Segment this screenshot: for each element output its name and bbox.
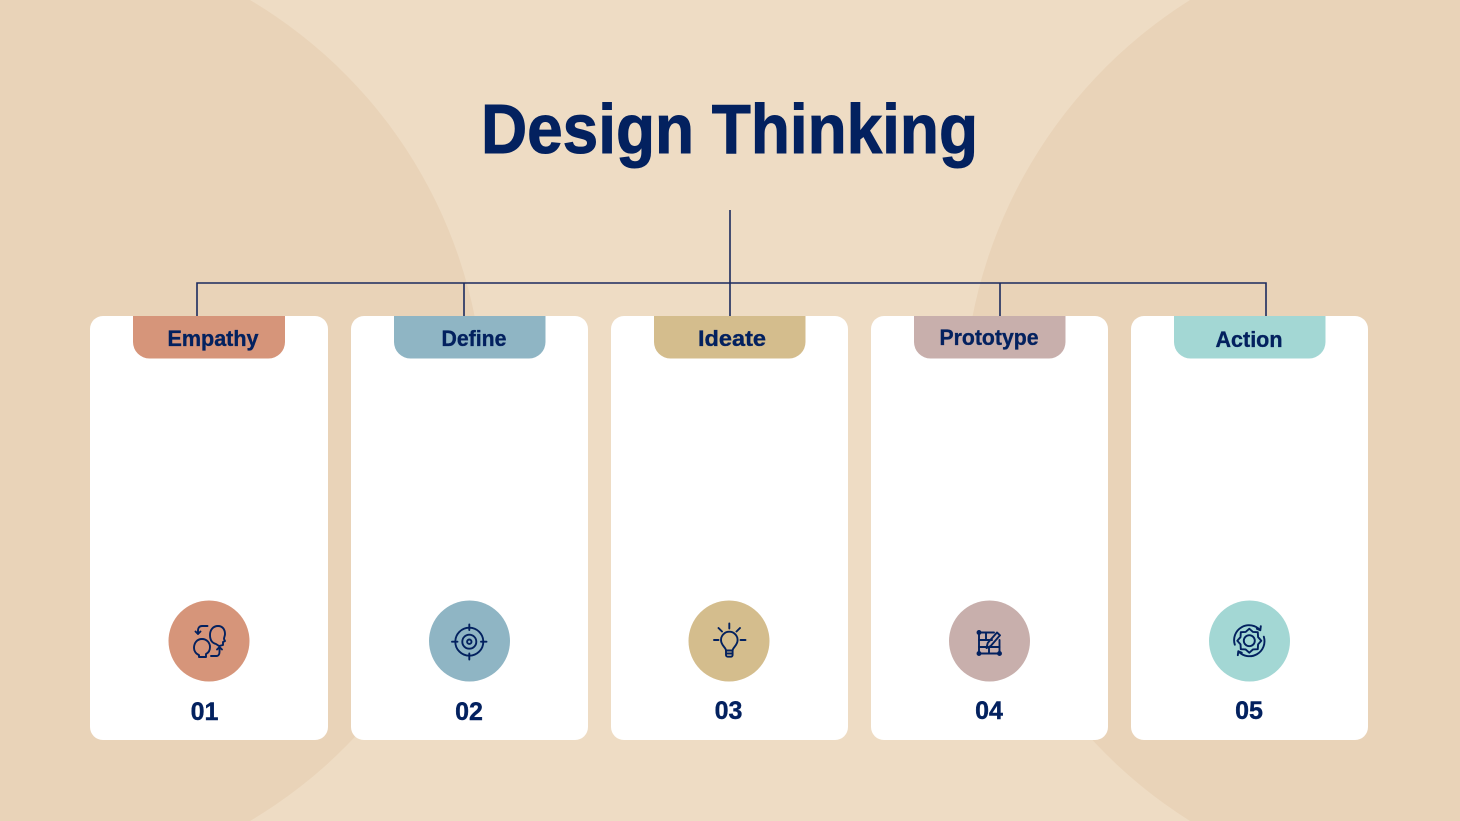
label: Ideate: Ideate bbox=[698, 326, 766, 351]
tab: Action bbox=[1174, 316, 1326, 358]
panel: Prototype bbox=[871, 316, 1108, 740]
title: Design Thinking bbox=[481, 90, 978, 168]
icon circle: two heads exchanging ideas bbox=[168, 600, 250, 682]
icon circle: target bbox=[429, 600, 510, 682]
number: 02: 02 bbox=[455, 698, 483, 726]
tab: Ideate bbox=[654, 316, 806, 358]
number: 03: 03 bbox=[715, 697, 742, 725]
number: 04: 04 bbox=[975, 697, 1003, 725]
panel: Action bbox=[1131, 316, 1368, 740]
label: Define: Define bbox=[442, 326, 506, 351]
tab: Prototype bbox=[914, 316, 1066, 358]
label: Action: Action bbox=[1216, 327, 1282, 352]
number: 05: 05 bbox=[1235, 697, 1263, 725]
label: Prototype: Prototype bbox=[940, 325, 1038, 350]
icon circle: light bulb bbox=[688, 600, 770, 682]
tab: Define bbox=[394, 316, 546, 358]
icon circle: gear with cycle arrows bbox=[1209, 600, 1290, 682]
number: 01: 01 bbox=[191, 698, 218, 726]
panel: Define bbox=[351, 316, 588, 740]
panel: Empathy bbox=[90, 316, 328, 740]
connector tree bbox=[197, 210, 1266, 317]
label: Empathy: Empathy bbox=[168, 326, 259, 351]
icon circle: blueprint and pencil bbox=[949, 600, 1030, 682]
tab: Empathy bbox=[133, 316, 285, 358]
panel: Ideate bbox=[611, 316, 848, 740]
